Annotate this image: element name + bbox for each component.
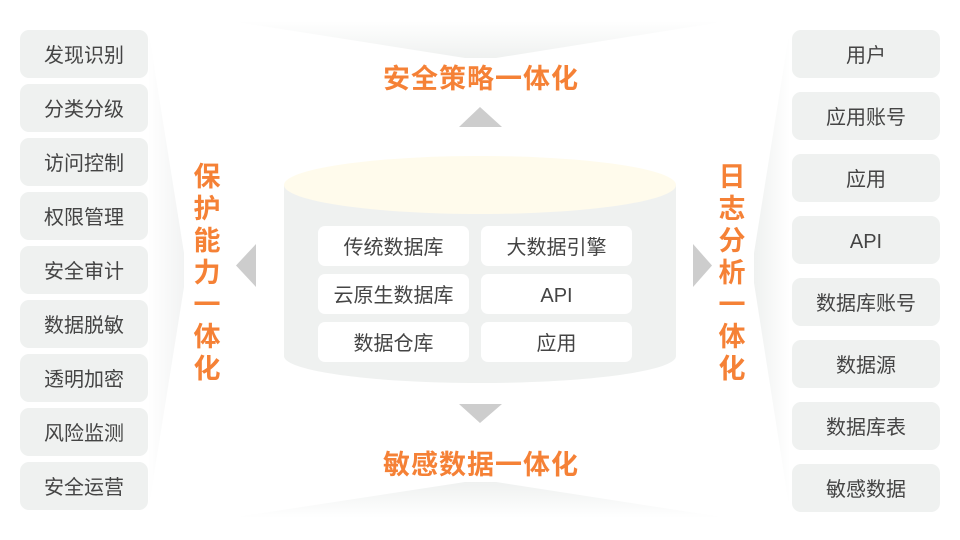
panel: right list: API: [850, 230, 882, 252]
arrow: up: [459, 107, 502, 127]
panel: left list: 发现识别: [44, 45, 124, 67]
panel: right list: 敏感数据: [826, 479, 906, 501]
cylinder: [284, 156, 676, 383]
heading: top: 安全策略一体化: [383, 64, 579, 94]
panel: database items: 大数据引擎: [506, 237, 606, 259]
heading: right vertical: 日志分析一体化: [718, 162, 746, 384]
panel: right list: 数据库表: [826, 417, 906, 439]
panel: right list: 应用账号: [826, 107, 906, 129]
heading: bottom: 敏感数据一体化: [383, 450, 579, 480]
panel: database items: 云原生数据库: [334, 285, 454, 307]
arrow: right: [693, 244, 712, 287]
funnel: bottom: [230, 482, 728, 518]
panel: left list: 分类分级: [44, 99, 124, 121]
panel: database items: [318, 226, 632, 362]
panel: right list: 应用: [846, 169, 886, 191]
funnel: left: [148, 28, 184, 512]
panel: left list: 数据脱敏: [44, 315, 124, 337]
panel: database items: 应用: [536, 333, 576, 355]
panel: left list: 访问控制: [44, 153, 124, 175]
panel: right list: 用户: [846, 45, 886, 67]
panel: database items: API: [540, 284, 573, 306]
panel: database items: 传统数据库: [344, 237, 444, 259]
panel: left list: 安全运营: [44, 477, 124, 499]
funnel: right: [754, 28, 790, 512]
panel: right list: 数据源: [836, 355, 896, 377]
panel: right list: 数据库账号: [816, 293, 916, 315]
arrow: left: [236, 244, 256, 287]
panel: left list: [20, 30, 148, 510]
panel: left list: 安全审计: [44, 261, 124, 283]
panel: left list: 透明加密: [44, 369, 124, 391]
panel: right list: [792, 30, 940, 512]
panel: left list: 权限管理: [44, 207, 124, 229]
heading: left vertical: 保护能力一体化: [194, 162, 220, 384]
panel: left list: 风险监测: [44, 423, 124, 445]
arrow: down: [459, 404, 502, 423]
funnel: top: [230, 21, 728, 58]
panel: database items: 数据仓库: [354, 333, 434, 355]
